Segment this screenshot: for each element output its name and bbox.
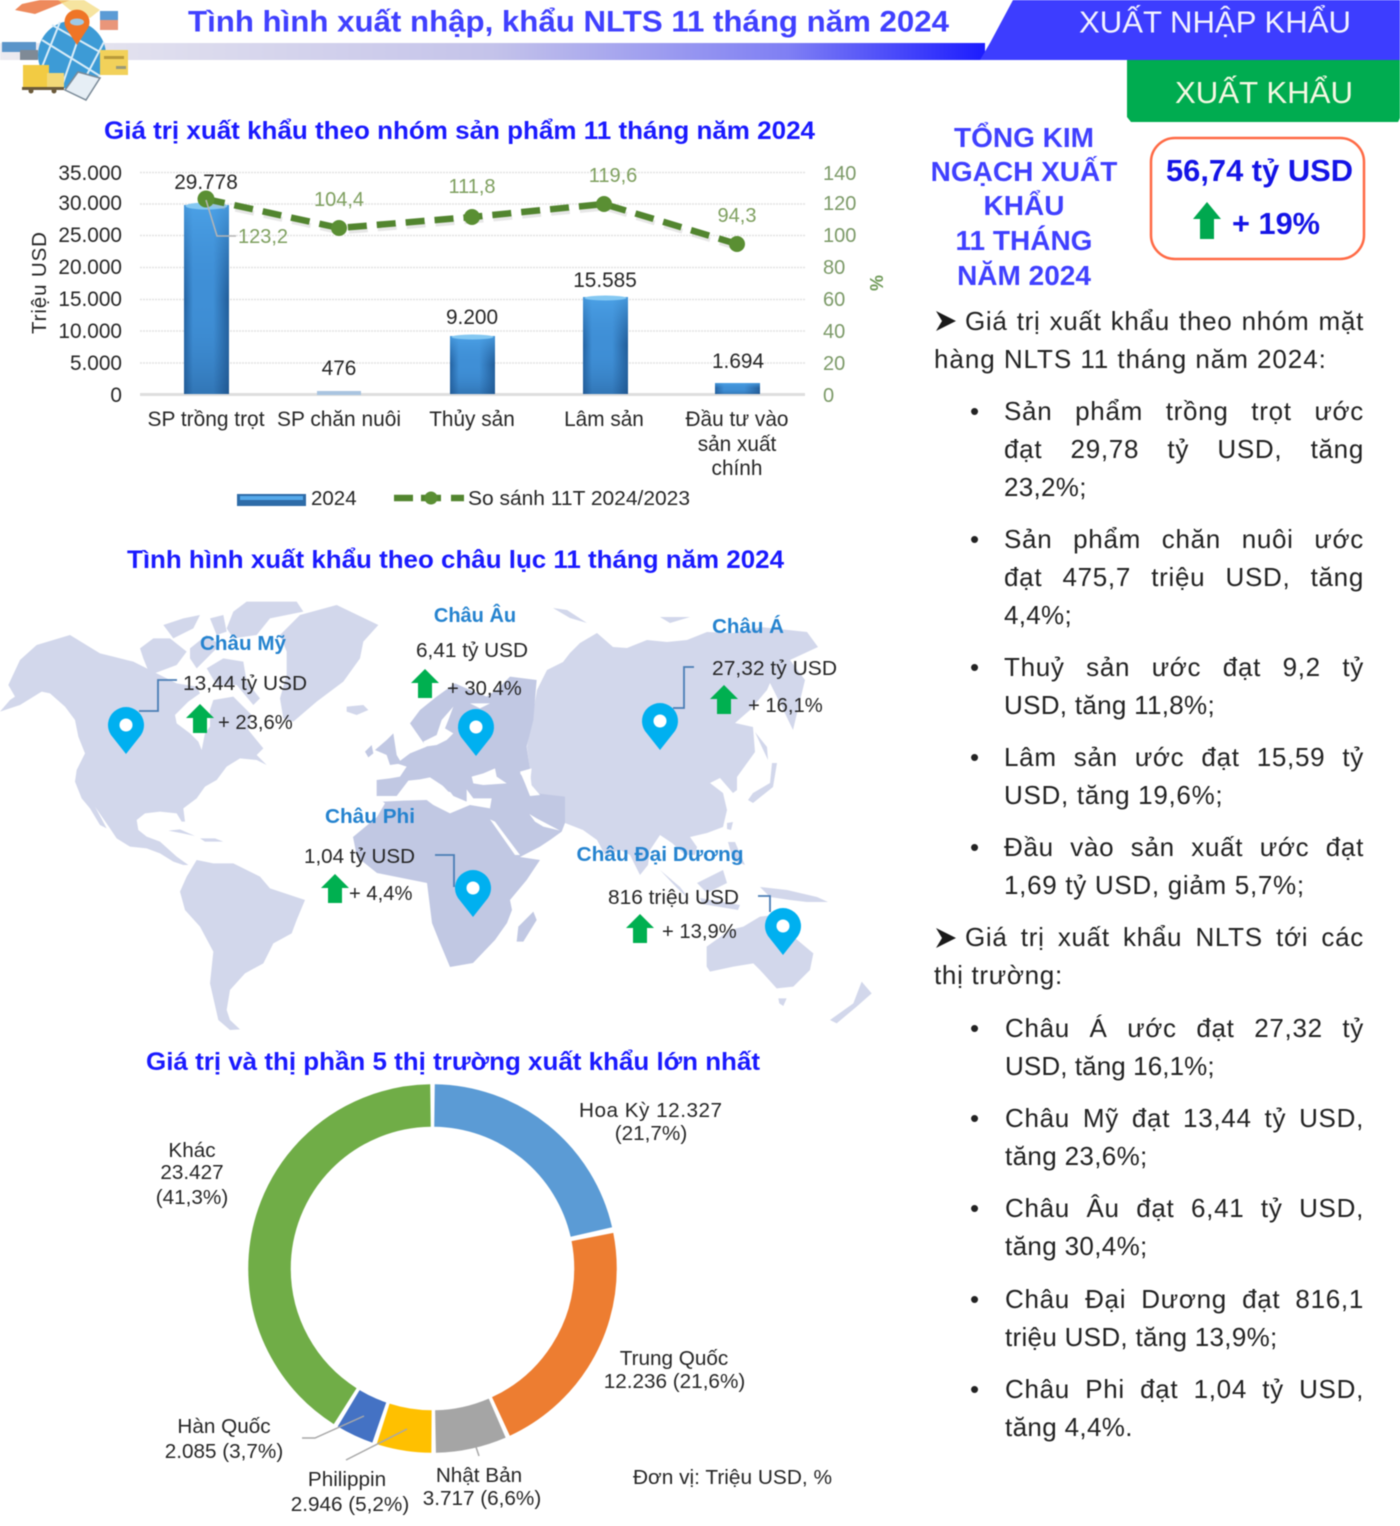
right axis labels: 80	[823, 257, 845, 279]
line value labels	[238, 165, 756, 248]
line value labels: 104,4	[314, 189, 364, 211]
donut labels: (41,3%)	[156, 1186, 228, 1209]
callout: Châu Âu: Châu Âu	[434, 603, 516, 627]
donut labels: 2.085 (3,7%)	[165, 1440, 283, 1463]
bar and line chart	[28, 162, 887, 510]
right axis labels: 60	[823, 289, 845, 311]
callout: Châu Đại Dương: + 13,9%	[662, 921, 737, 943]
product bullet list: USD, tăng 19,6%;	[1004, 780, 1223, 810]
callout: Châu Mỹ: Châu Mỹ	[200, 633, 287, 655]
line value labels: 94,3	[718, 205, 756, 227]
left axis labels	[58, 162, 122, 407]
Asia	[527, 627, 818, 875]
left axis labels: 30.000	[58, 192, 122, 215]
product bullet list: USD, tăng 11,8%;	[1004, 690, 1215, 720]
total heading: NĂM 2024	[957, 260, 1091, 291]
title: Tình hình xuất nhập, khẩu NLTS 11 tháng năm 2024	[188, 6, 949, 38]
left axis labels: 25.000	[58, 224, 122, 247]
left axis labels: 35.000	[58, 162, 122, 185]
bar value labels: 9.200	[446, 306, 498, 329]
market bullet list	[970, 1013, 1364, 1442]
left axis labels: 10.000	[58, 320, 122, 343]
legend: 2024	[311, 487, 357, 510]
pin	[108, 707, 144, 754]
market bullet list: •	[970, 1103, 980, 1133]
donut labels: 12.236 (21,6%)	[604, 1370, 745, 1393]
line value labels: 123,2	[238, 226, 288, 248]
total heading: TỔNG KIM	[954, 122, 1094, 153]
bars	[184, 202, 760, 395]
Europe and Africa	[353, 677, 565, 967]
product bullet list: Lâm sản ước đạt 15,59 tỷ	[1004, 742, 1364, 772]
header band: XUẤT NHẬP KHẨU	[1079, 4, 1351, 40]
right axis labels: 140	[823, 163, 856, 185]
category labels	[148, 408, 788, 480]
Australia and New Zealand	[707, 915, 872, 1023]
callout: Châu Phi	[304, 806, 491, 917]
callout: Châu Âu	[411, 603, 528, 756]
callout: Châu Đại Dương	[576, 844, 801, 955]
category labels: Lâm sản	[564, 408, 644, 431]
left axis labels: 0	[110, 384, 122, 407]
left axis labels: 5.000	[70, 352, 122, 375]
donut heading: Giá trị và thị phần 5 thị trường xuất khẩu lớn nhất	[146, 1048, 761, 1076]
legend	[237, 487, 690, 510]
chart heading: products: Giá trị xuất khẩu theo nhóm sản phẩm 11 tháng năm 2024	[104, 117, 815, 145]
callout: Châu Mỹ: 13,44 tỷ USD	[183, 672, 307, 695]
bar value labels: 29.778	[174, 171, 238, 194]
icon: arrow bullet markets	[936, 928, 956, 948]
product bullet list: 23,2%;	[1004, 472, 1087, 502]
callout: Châu Phi: + 4,4%	[349, 883, 412, 905]
callout: Châu Á: + 16,1%	[748, 695, 823, 717]
right axis labels: 20	[823, 353, 845, 375]
callout: Châu Đại Dương: 816 triệu USD	[608, 886, 739, 909]
market bullet list: •	[970, 1193, 980, 1223]
unit note: Đơn vị: Triệu USD, %	[633, 1467, 832, 1489]
product bullet list: 4,4%;	[1004, 600, 1072, 630]
market bullet list: triệu USD, tăng 13,9%;	[1005, 1322, 1278, 1352]
header band	[0, 0, 1400, 60]
product bullet list: •	[970, 396, 980, 426]
donut labels: Nhật Bản	[436, 1464, 522, 1487]
line value labels: 111,8	[448, 176, 496, 198]
product bullet list: •	[970, 524, 980, 554]
donut labels: 23.427	[160, 1161, 224, 1184]
product bullet list: Sản phẩm chăn nuôi ước	[1004, 524, 1364, 554]
category labels: sản xuất	[698, 433, 777, 456]
donut labels: 2.946 (5,2%)	[291, 1493, 409, 1516]
product bullet list: 1,69 tỷ USD, giảm 5,7%;	[1004, 870, 1305, 900]
right axis labels: 0	[823, 385, 834, 407]
donut labels	[156, 1099, 745, 1516]
right axis labels: 120	[823, 193, 856, 215]
product bullet list: Sản phẩm trồng trọt ước	[1004, 396, 1364, 426]
market bullet list: Châu Âu đạt 6,41 tỷ USD,	[1005, 1193, 1364, 1223]
bar value labels: 1.694	[712, 350, 764, 373]
left axis title: Triệu USD	[28, 232, 51, 334]
product bullet list: đạt 475,7 triệu USD, tăng	[1004, 562, 1364, 592]
product summary heading: Giá trị xuất khẩu theo nhóm mặt	[965, 306, 1364, 336]
total value box: 56,74 tỷ USD	[1166, 153, 1353, 188]
callout: Châu Phi: Châu Phi	[325, 806, 415, 828]
right axis title: %	[867, 275, 887, 291]
donut labels: Philippin	[308, 1468, 386, 1491]
market bullet list: tăng 23,6%;	[1005, 1141, 1148, 1171]
callout: Châu Á: 27,32 tỷ USD	[712, 657, 837, 680]
callout: Châu Á: Châu Á	[712, 615, 784, 638]
map heading: Tình hình xuất khẩu theo châu lục 11 tháng năm 2024	[127, 546, 784, 574]
product summary heading	[934, 306, 1364, 374]
product bullet list: Đầu vào sản xuất ước đạt	[1004, 832, 1364, 862]
donut labels: Khác	[168, 1139, 216, 1162]
right axis labels: 100	[823, 225, 856, 247]
market bullet list: USD, tăng 16,1%;	[1005, 1051, 1215, 1081]
total heading: KHẨU	[984, 190, 1064, 221]
market bullet list: •	[970, 1013, 980, 1043]
callout: Châu Mỹ	[108, 633, 307, 754]
category labels: SP trồng trọt	[148, 408, 265, 431]
total heading	[931, 122, 1117, 291]
Arctic islands and Greenland	[140, 602, 378, 722]
callout: Châu Âu: 6,41 tỷ USD	[416, 639, 528, 662]
donut chart	[156, 1099, 745, 1516]
market summary heading: Giá trị xuất khẩu NLTS tới các	[965, 922, 1364, 952]
callout: Châu Á	[642, 615, 837, 750]
section tag: XUẤT KHẨU: XUẤT KHẨU	[1175, 75, 1353, 110]
product bullet list: Thuỷ sản ước đạt 9,2 tỷ	[1004, 652, 1364, 682]
left axis labels: 20.000	[58, 256, 122, 279]
donut labels: (21,7%)	[615, 1122, 687, 1145]
market bullet list: Châu Á ước đạt 27,32 tỷ	[1005, 1013, 1364, 1043]
section tag: XUẤT KHẨU	[1127, 60, 1400, 122]
product bullet list	[970, 396, 1364, 900]
islands of Asia and Oceania	[553, 608, 828, 910]
market bullet list: •	[970, 1374, 980, 1404]
icon: arrow bullet products	[936, 311, 956, 331]
market bullet list: tăng 4,4%.	[1005, 1412, 1133, 1442]
right axis labels: 40	[823, 321, 845, 343]
total heading: NGẠCH XUẤT	[931, 156, 1117, 187]
market bullet list: Châu Phi đạt 1,04 tỷ USD,	[1005, 1374, 1364, 1404]
donut leader lines	[302, 1416, 479, 1460]
total value box	[1151, 138, 1364, 259]
product bullet list: đạt 29,78 tỷ USD, tăng	[1004, 434, 1364, 464]
donut labels: Trung Quốc	[620, 1347, 728, 1370]
right axis labels	[823, 163, 856, 407]
callout: Châu Mỹ: + 23,6%	[218, 712, 293, 734]
line series	[198, 190, 745, 252]
market bullet list: •	[970, 1284, 980, 1314]
world map	[0, 602, 872, 1030]
category labels: SP chăn nuôi	[277, 408, 401, 431]
category labels: Thủy sản	[429, 408, 515, 431]
market bullet list: Châu Đại Dương đạt 816,1	[1005, 1284, 1364, 1314]
callout: Châu Đại Dương: Châu Đại Dương	[576, 844, 744, 866]
product bullet list: •	[970, 742, 980, 772]
market bullet list: Châu Mỹ đạt 13,44 tỷ USD,	[1005, 1103, 1364, 1133]
bar value labels: 476	[322, 357, 356, 380]
product bullet list: •	[970, 832, 980, 862]
market summary heading	[934, 922, 1364, 990]
total heading: 11 THÁNG	[956, 225, 1092, 256]
category labels: Đầu tư vào	[686, 408, 788, 431]
Americas	[0, 635, 305, 1030]
market summary heading: thị trường:	[934, 960, 1063, 990]
category labels: chính	[712, 457, 762, 480]
market bullet list: tăng 30,4%;	[1005, 1231, 1148, 1261]
callout: Châu Phi: 1,04 tỷ USD	[304, 845, 415, 868]
donut labels: 3.717 (6,6%)	[423, 1487, 541, 1510]
bar value labels: 15.585	[573, 269, 637, 292]
Madagascar	[517, 912, 537, 942]
bar value labels	[174, 171, 764, 380]
product bullet list: •	[970, 652, 980, 682]
donut labels: Hàn Quốc	[177, 1415, 271, 1438]
left axis labels: 15.000	[58, 288, 122, 311]
total value box: + 19%	[1232, 206, 1320, 241]
icon: trade globe	[2, 0, 128, 100]
line value labels: 119,6	[589, 165, 637, 187]
donut labels: Hoa Kỳ 12.327	[579, 1099, 722, 1122]
callout: Châu Âu: + 30,4%	[447, 678, 522, 700]
legend: So sánh 11T 2024/2023	[468, 488, 690, 510]
product summary heading: hàng NLTS 11 tháng năm 2024:	[934, 344, 1327, 374]
